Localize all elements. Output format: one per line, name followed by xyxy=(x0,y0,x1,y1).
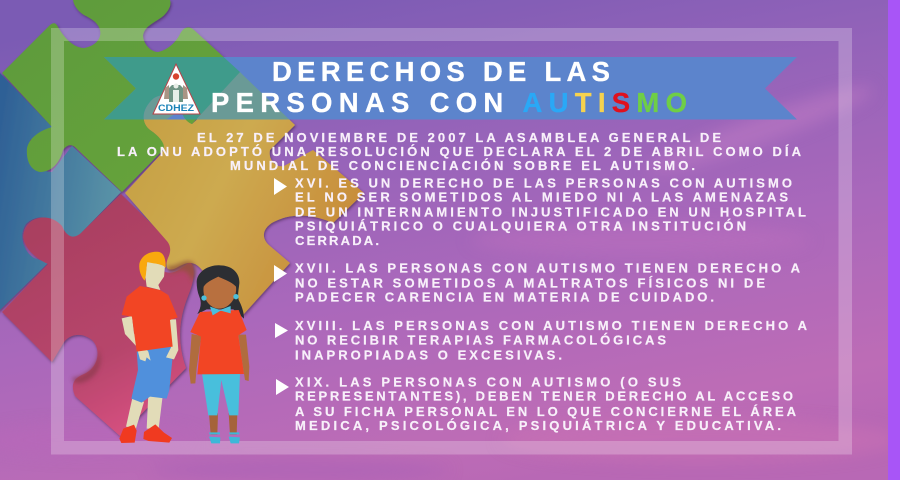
right XVII: NO ESTAR SOMETIDOS A MALTRATOS FÍSICOS NI DE xyxy=(295,275,765,290)
puzzle piece: red xyxy=(2,194,194,436)
title: DERECHOS DE LAS xyxy=(272,56,610,87)
right XVI: XVI. ES UN DERECHO DE LAS PERSONAS CON AUTISMO xyxy=(295,176,792,190)
intro text: LA ONU ADOPTÓ UNA RESOLUCIÓN QUE DECLARA EL 2 DE ABRIL COMO DÍA xyxy=(117,144,802,159)
logo: CDHEZ xyxy=(153,64,200,114)
title: PERSONAS CON AUTISMO xyxy=(211,87,687,118)
right stripe xyxy=(888,0,900,480)
right XIX: XIX. LAS PERSONAS CON AUTISMO (O SUS xyxy=(295,375,681,390)
intro text: EL 27 DE NOVIEMBRE DE 2007 LA ASAMBLEA GENERAL DE xyxy=(197,130,721,145)
right XVII: PADECER CARENCIA EN MATERIA DE CUIDADO. xyxy=(295,290,714,305)
logo: CDHEZ: CDHEZ xyxy=(158,103,194,114)
right XVI: DE UN INTERNAMIENTO INJUSTIFICADO EN UN HOSPITAL xyxy=(295,205,806,220)
right XVII: XVII. LAS PERSONAS CON AUTISMO TIENEN DERECHO A xyxy=(295,261,801,276)
right XVI xyxy=(274,176,806,248)
right XVI: PSIQUIÁTRICO O CUALQUIERA OTRA INSTITUCIÓN xyxy=(295,219,746,234)
right XVIII: NO RECIBIR TERAPIAS FARMACOLÓGICAS xyxy=(295,333,666,348)
ribbon over puzzle pieces xyxy=(104,57,289,120)
arrow: XVIII xyxy=(275,323,288,338)
girl xyxy=(189,265,249,443)
boy xyxy=(119,252,178,443)
right XIX xyxy=(276,375,797,433)
right XVIII xyxy=(275,318,808,362)
right XVI: CERRADA. xyxy=(295,233,379,248)
arrow: XVII xyxy=(274,265,287,282)
arrow: XIX xyxy=(276,379,289,395)
right XVIII: INAPROPIADAS O EXCESIVAS. xyxy=(295,347,562,362)
right XIX: A SU FICHA PERSONAL EN LO QUE CONCIERNE EL ÁREA xyxy=(295,404,797,419)
right XIX: REPRESENTANTES), DEBEN TENER DERECHO AL ACCESO xyxy=(295,389,793,404)
right XVII xyxy=(274,261,801,305)
right XVI: EL NO SER SOMETIDOS AL MIEDO NI A LAS AMENAZAS xyxy=(295,190,788,205)
puzzle piece: yellow xyxy=(125,77,364,315)
puzzle socket shadows xyxy=(72,261,196,383)
intro text: MUNDIAL DE CONCIENCIACIÓN SOBRE EL AUTISMO. xyxy=(230,158,695,173)
right XVIII: XVIII. LAS PERSONAS CON AUTISMO TIENEN DERECHO A xyxy=(295,318,808,333)
children xyxy=(119,252,249,443)
title xyxy=(211,56,687,118)
puzzle piece: green xyxy=(2,0,240,192)
puzzle xyxy=(0,0,364,436)
frame xyxy=(51,28,852,454)
puzzle piece: blue xyxy=(0,71,121,312)
right XIX: MEDICA, PSICOLÓGICA, PSIQUIÁTRICA Y EDUCATIVA. xyxy=(295,418,781,433)
arrow: XVI xyxy=(274,178,287,195)
intro text xyxy=(117,130,802,173)
ribbon xyxy=(104,57,797,120)
